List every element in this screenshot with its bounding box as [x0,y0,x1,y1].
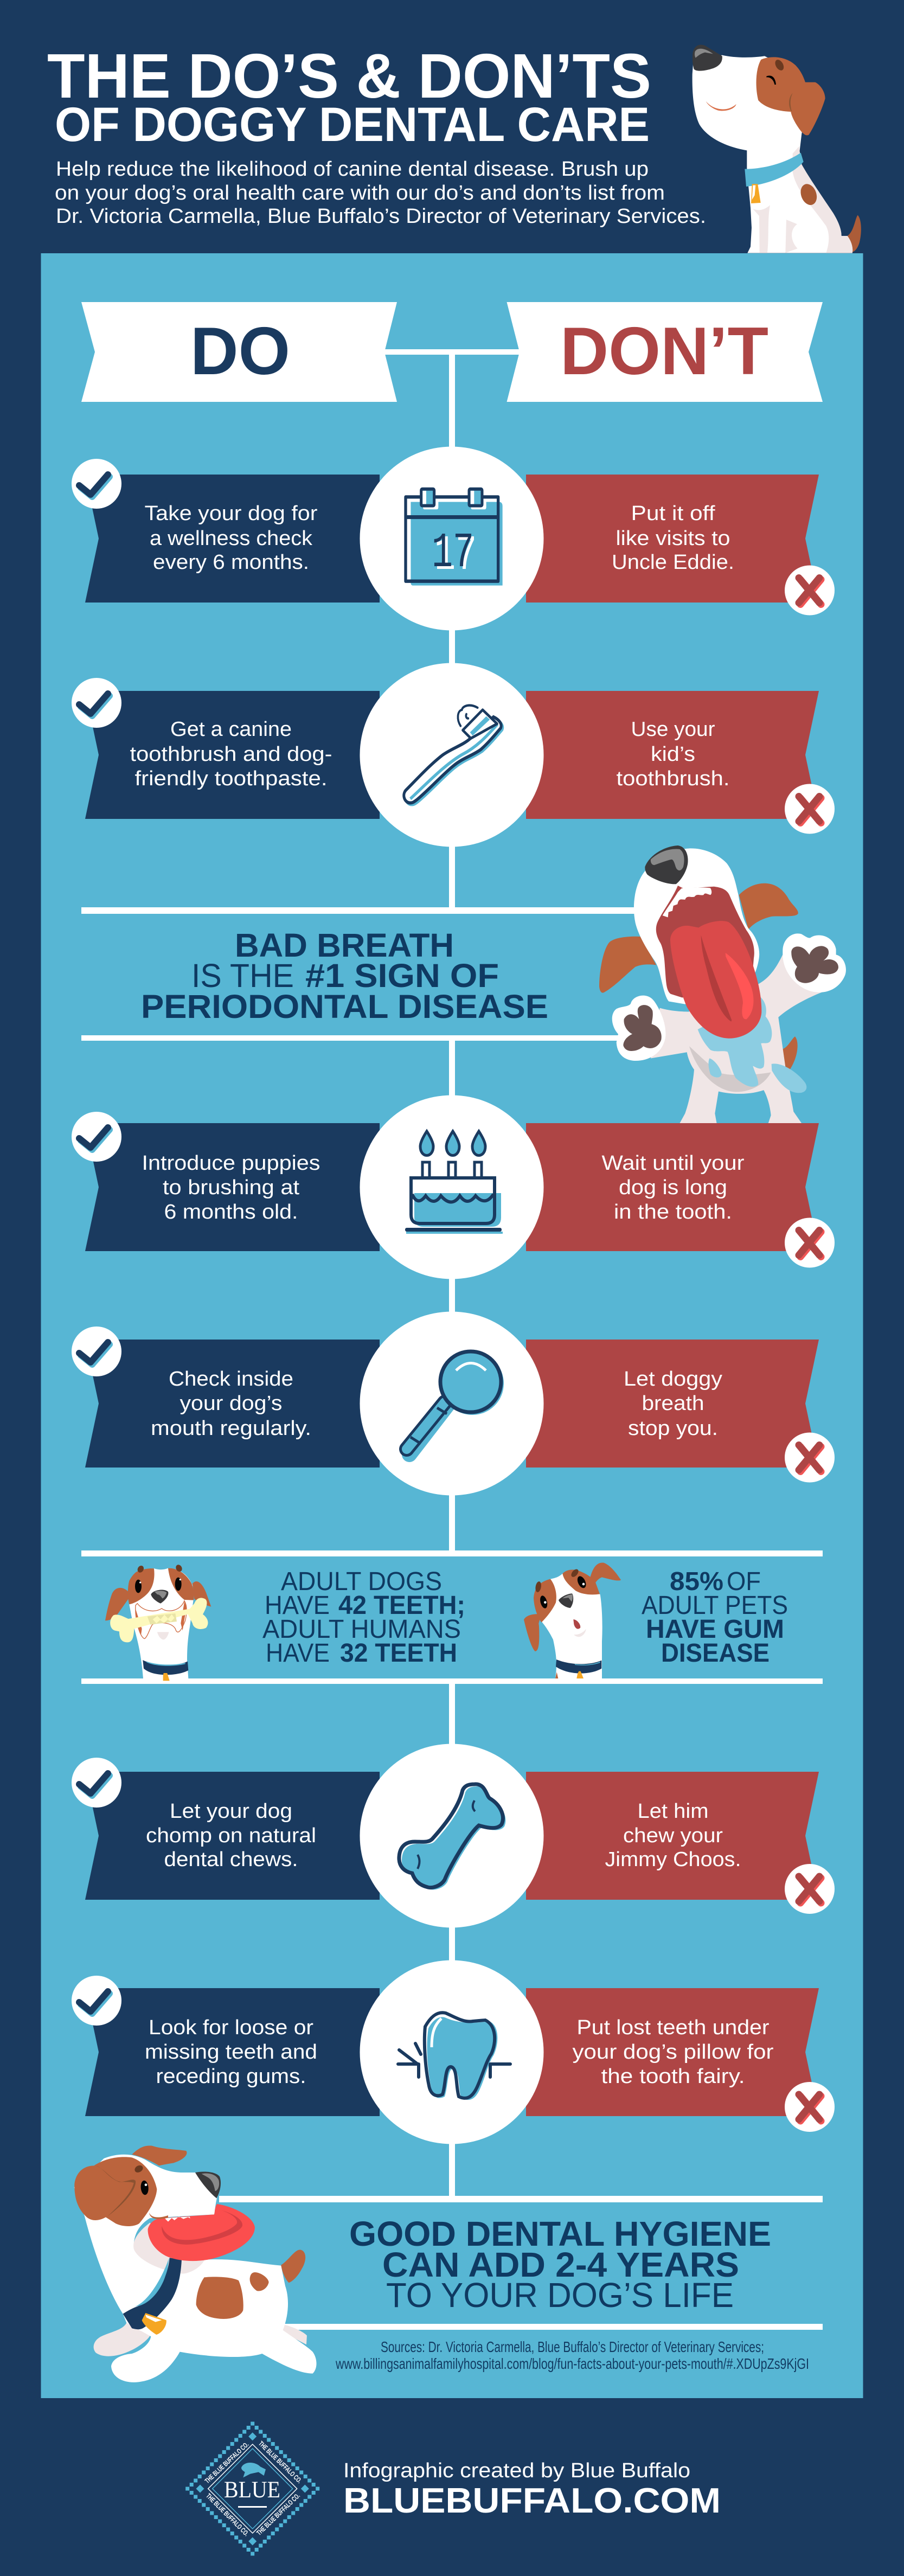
don't text: Use your [631,718,715,741]
don't band [526,1123,819,1251]
don't banner [507,302,823,402]
check icon [72,1758,121,1808]
circle [360,1311,543,1496]
don't text: Let doggy [624,1368,722,1390]
do text: 6 months old. [164,1201,298,1223]
stat: gum disease [642,1567,788,1668]
logo: blue buffalo: THE BLUE BUFFALO CO. [203,2440,251,2485]
illustration: dog looking aside [524,1563,621,1678]
don't text: like visits to [616,527,730,550]
intro text [55,158,706,228]
row: toothbrush [72,663,835,847]
don't band [526,691,819,819]
stats band [81,1550,823,1684]
sources [335,2338,809,2372]
illustration: dog with tongue out [599,845,846,1123]
do text: to brushing at [163,1176,299,1199]
do band [85,1123,380,1251]
illustration: dog looking up on panel [693,44,861,253]
don't text: dog is long [619,1176,727,1199]
do text [142,1152,320,1223]
callout: good dental hygiene [219,2196,823,2330]
stat: teeth: ADULT HUMANS [262,1615,461,1644]
don't text [602,1152,745,1223]
logo: blue buffalo: THE BLUE BUFFALO CO. [255,2491,302,2537]
circle [360,447,543,630]
check icon [72,1327,121,1376]
don't band [526,1772,819,1900]
don't band [526,475,819,603]
do text: toothbrush and dog- [130,743,332,766]
don't text: Wait until your [602,1152,745,1175]
don't text: chew your [623,1824,723,1847]
callout: bad breath: #1 SIGN OF [305,957,499,994]
logo: blue buffalo: BLUE [224,2477,280,2503]
do text: Look for loose or [149,2016,313,2039]
icon: bone [399,1784,505,1889]
do text [145,2016,317,2088]
logo: blue buffalo: THE BLUE BUFFALO CO. [257,2439,304,2485]
cross icon [785,1433,835,1483]
don't text: Put it off [631,502,715,525]
icon: loose tooth [398,2013,510,2100]
intro text: on your dog’s oral health care with our do’s and don’ts list from [55,182,665,204]
stat: teeth [262,1567,465,1668]
logo: blue buffalo: THE BLUE BUFFALO CO. [204,2492,251,2537]
callout: bad breath: IS THE [191,957,294,994]
circle [360,1960,543,2144]
don't text: Jimmy Choos. [605,1848,741,1871]
don't text: breath [642,1392,704,1415]
row: puppies [72,1095,835,1279]
do text: every 6 months. [153,551,309,574]
do banner: DO [190,314,290,389]
stat: gum disease: OF [727,1567,761,1596]
header [47,41,706,228]
do text: a wellness check [150,527,313,550]
check icon [72,459,121,509]
credit: BLUEBUFFALO.COM [343,2481,721,2520]
do text: Let your dog [170,1800,292,1823]
logo: blue buffalo [185,2422,319,2555]
left paw [612,996,665,1061]
do text: Get a canine [170,718,292,741]
connector lines [384,349,520,2199]
stat: gum disease: 85% [670,1567,723,1596]
title: OF DOGGY DENTAL CARE [55,97,650,151]
stat: gum disease: ADULT PETS [642,1591,788,1620]
do band [85,1772,380,1900]
do text: receding gums. [156,2065,306,2088]
do band [85,1988,380,2116]
cross icon [785,784,835,834]
intro text: Help reduce the likelihood of canine dental disease. Brush up [56,158,649,181]
do text [146,1800,316,1871]
callout: bad breath: PERIODONTAL DISEASE [141,988,548,1025]
icon: calendar: 17 [432,526,474,581]
don't text [573,2016,774,2088]
icon: cake [405,1131,503,1234]
icon: toothbrush [404,706,503,805]
do text: Check inside [169,1368,293,1390]
title [47,41,651,151]
do text: chomp on natural [146,1824,316,1847]
credit [343,2459,721,2520]
do text: your dog’s [180,1392,282,1415]
circle [360,1744,543,1927]
do band [85,475,380,603]
stat: teeth: HAVE [265,1591,330,1620]
don't text: stop you. [628,1417,718,1440]
credit: Infographic created by Blue Buffalo [343,2459,690,2482]
do band [85,691,380,819]
stat: teeth: 32 TEETH [340,1639,457,1668]
don't text: toothbrush. [616,767,730,790]
stat: teeth: ADULT DOGS [281,1567,442,1596]
don't text: Let him [638,1800,708,1823]
check icon [72,1976,121,2026]
callout: bad breath: BAD BREATH [235,927,454,964]
icon: magnifying glass [407,1351,504,1454]
do text: friendly toothpaste. [134,767,328,790]
don't text [612,502,734,574]
cross icon [785,1218,835,1268]
stat: gum disease: DISEASE [661,1639,770,1668]
do text [144,502,318,574]
don't text [616,718,730,790]
illustration: dog with bone [105,1563,211,1681]
don't text: Put lost teeth under [577,2016,770,2039]
circle [360,663,543,847]
callout: good dental hygiene: CAN ADD 2-4 YEARS [382,2245,739,2284]
don't text: kid’s [651,743,695,766]
don't text: your dog’s pillow for [573,2041,774,2064]
do band [85,1340,380,1468]
don't band [526,1988,819,2116]
row: wellness check [72,447,835,630]
sources: Sources: Dr. Victoria Carmella, Blue Buffalo’s Director of Veterinary Services; [381,2338,764,2355]
don't band [526,1340,819,1468]
icon: calendar: 17 [434,528,477,584]
do text: Introduce puppies [142,1152,320,1175]
right paw [783,933,846,992]
callout: good dental hygiene: TO YOUR DOG’S LIFE [386,2276,734,2315]
callout: good dental hygiene: GOOD DENTAL HYGIENE [349,2214,771,2253]
don't text: Uncle Eddie. [612,551,734,574]
do text: Take your dog for [144,502,318,525]
intro text: Dr. Victoria Carmella, Blue Buffalo’s Director of Veterinary Services. [56,205,706,228]
don't text [624,1368,722,1440]
illustration: running dog with frisbee [74,2145,317,2382]
don't banner: DON’T [560,314,768,389]
do text: mouth regularly. [151,1417,311,1440]
stat: teeth: 42 TEETH; [338,1591,465,1620]
don't text [605,1800,741,1871]
row: natural chews [72,1744,835,1927]
circle [360,1095,543,1279]
do banner [81,302,397,402]
don't text: the tooth fairy. [601,2065,745,2088]
row: check mouth [72,1311,835,1496]
cross icon [785,1864,835,1914]
don't text: in the tooth. [614,1201,732,1223]
row: loose teeth [72,1960,835,2144]
do text [151,1368,311,1440]
check icon [72,678,121,728]
do text: missing teeth and [145,2041,317,2064]
cross icon [785,565,835,615]
title: THE DO’S & DON’TS [47,41,651,111]
check icon [72,1112,121,1162]
do text: dental chews. [164,1848,298,1871]
callout: bad breath [81,907,640,1041]
stat: teeth: HAVE [266,1639,330,1668]
stat: gum disease: HAVE GUM [646,1615,784,1644]
icon: calendar [406,489,503,586]
do text [130,718,332,790]
cross icon [785,2082,835,2132]
main panel [41,253,863,2398]
